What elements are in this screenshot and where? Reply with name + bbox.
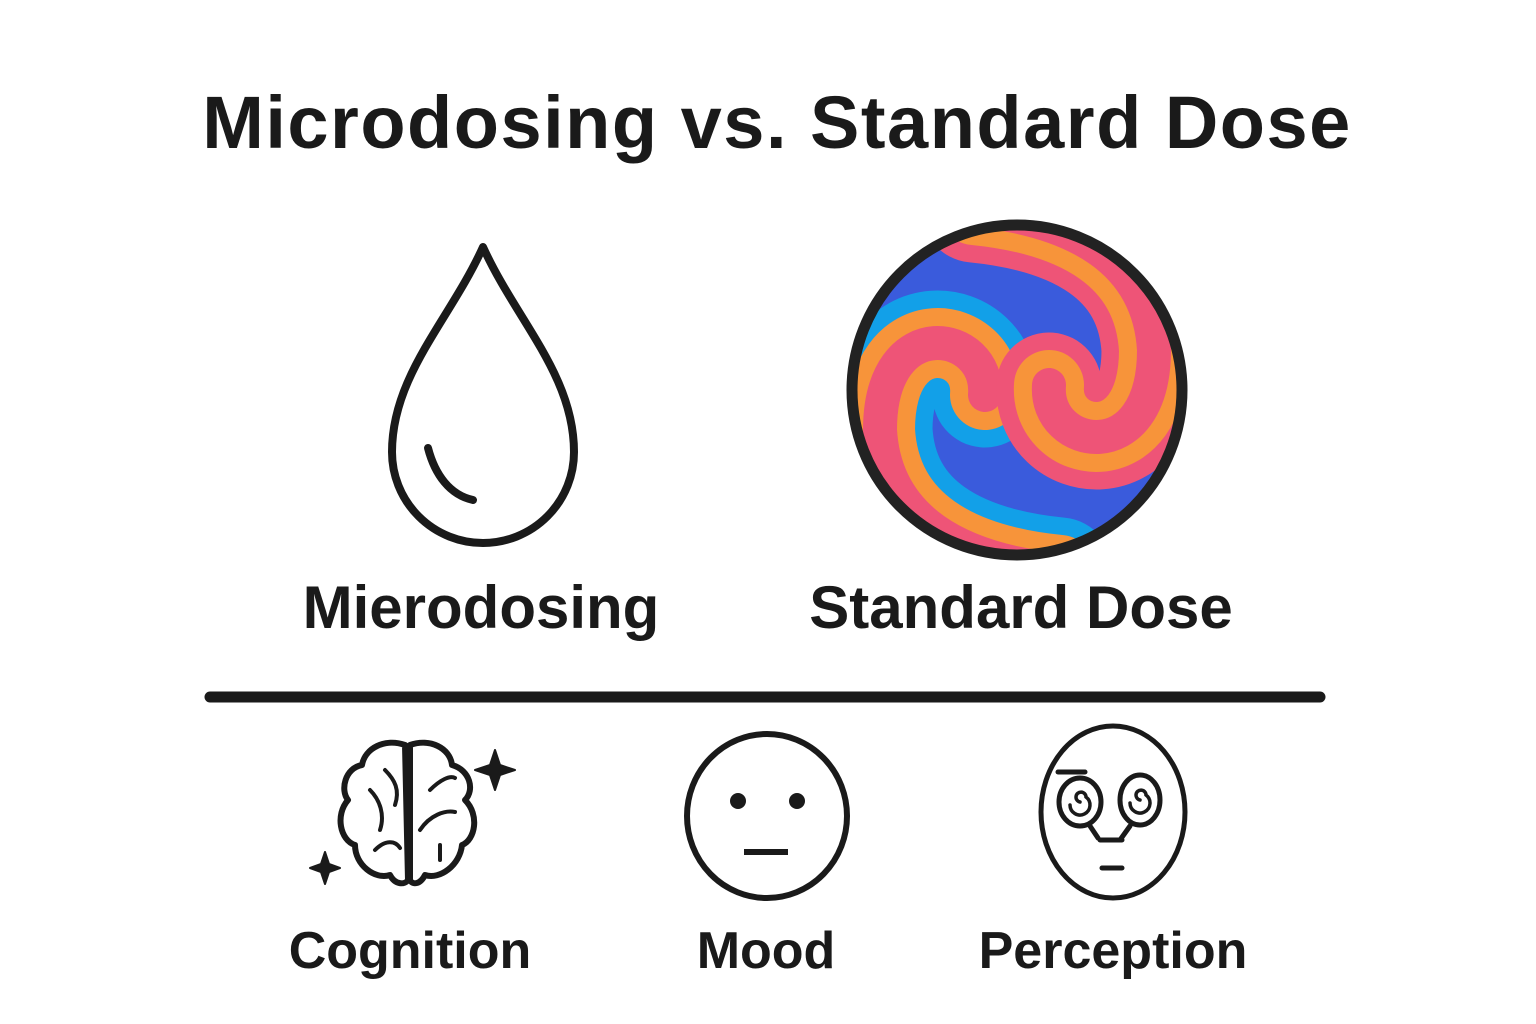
title: Microdosing vs. Standard Dose <box>202 81 1352 164</box>
divider <box>210 692 1320 702</box>
icon: neutral face (mood) <box>687 734 847 898</box>
icon: dazed face (perception) <box>1041 726 1185 898</box>
icon: water drop <box>392 247 574 543</box>
icon: brain with sparkles <box>310 743 515 884</box>
icon: colorful swirl <box>846 220 1188 560</box>
label: standard dose: Standard Dose <box>809 574 1233 641</box>
label: perception: Perception <box>979 922 1247 980</box>
label: mood: Mood <box>697 922 835 980</box>
label: cognition: Cognition <box>289 922 531 980</box>
label: microdosing: Mierodosing <box>303 574 659 641</box>
